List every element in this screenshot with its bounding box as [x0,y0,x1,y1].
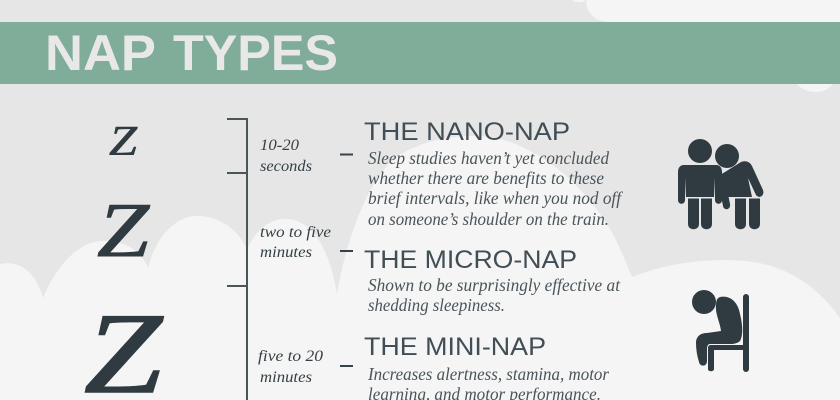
nano-nap description: Sleep studies haven’t yet concluded [368,148,609,168]
nano-nap description: brief intervals, like when you nod off [368,188,623,208]
connector dashes [340,154,353,366]
duration: two to five minutes [260,224,331,261]
section: nano-nap [364,118,623,229]
nano-nap description: whether there are benefits to these [368,168,604,188]
micro-nap title: THE MICRO-NAP [364,246,577,274]
micro-nap description: shedding sleepiness. [368,295,505,315]
heading banner [0,22,840,84]
mini-nap description [367,364,609,400]
duration: 10-20 seconds: seconds [260,158,312,175]
background cloud: upper right [586,0,840,22]
duration: two to five minutes: two to five [260,224,331,241]
background cloud: lower [0,136,840,400]
section: mini-nap [364,333,609,400]
duration: five to 20 minutes [258,348,323,386]
heading: NAP [45,25,156,81]
duration: 10-20 seconds: 10-20 [260,137,299,154]
duration: five to 20 minutes: five to 20 [258,348,323,365]
micro-nap description [368,275,621,315]
icon: person asleep on a chair [692,290,749,372]
duration: two to five minutes: minutes [260,244,312,261]
nano-nap description [368,148,623,229]
sleep letter: small z: Z [109,119,138,165]
background cloud: puff under the banner [797,84,833,92]
heading [45,25,338,81]
mini-nap description: Increases alertness, stamina, motor [367,364,609,384]
duration bracket [227,119,247,400]
sleep letter: medium Z: Z [97,187,150,273]
micro-nap description: Shown to be surprisingly effective at [368,275,621,295]
nano-nap title: THE NANO-NAP [364,118,570,146]
heading: TYPES [173,25,338,81]
section: micro-nap [364,246,621,315]
nano-nap description: on someone’s shoulder on the train. [368,209,609,229]
mini-nap title: THE MINI-NAP [364,333,546,361]
duration: five to 20 minutes: minutes [260,369,312,386]
background cloud: small top puff [572,0,586,2]
icon: person leaning on a shoulder [678,139,763,229]
duration: 10-20 seconds [260,137,312,175]
